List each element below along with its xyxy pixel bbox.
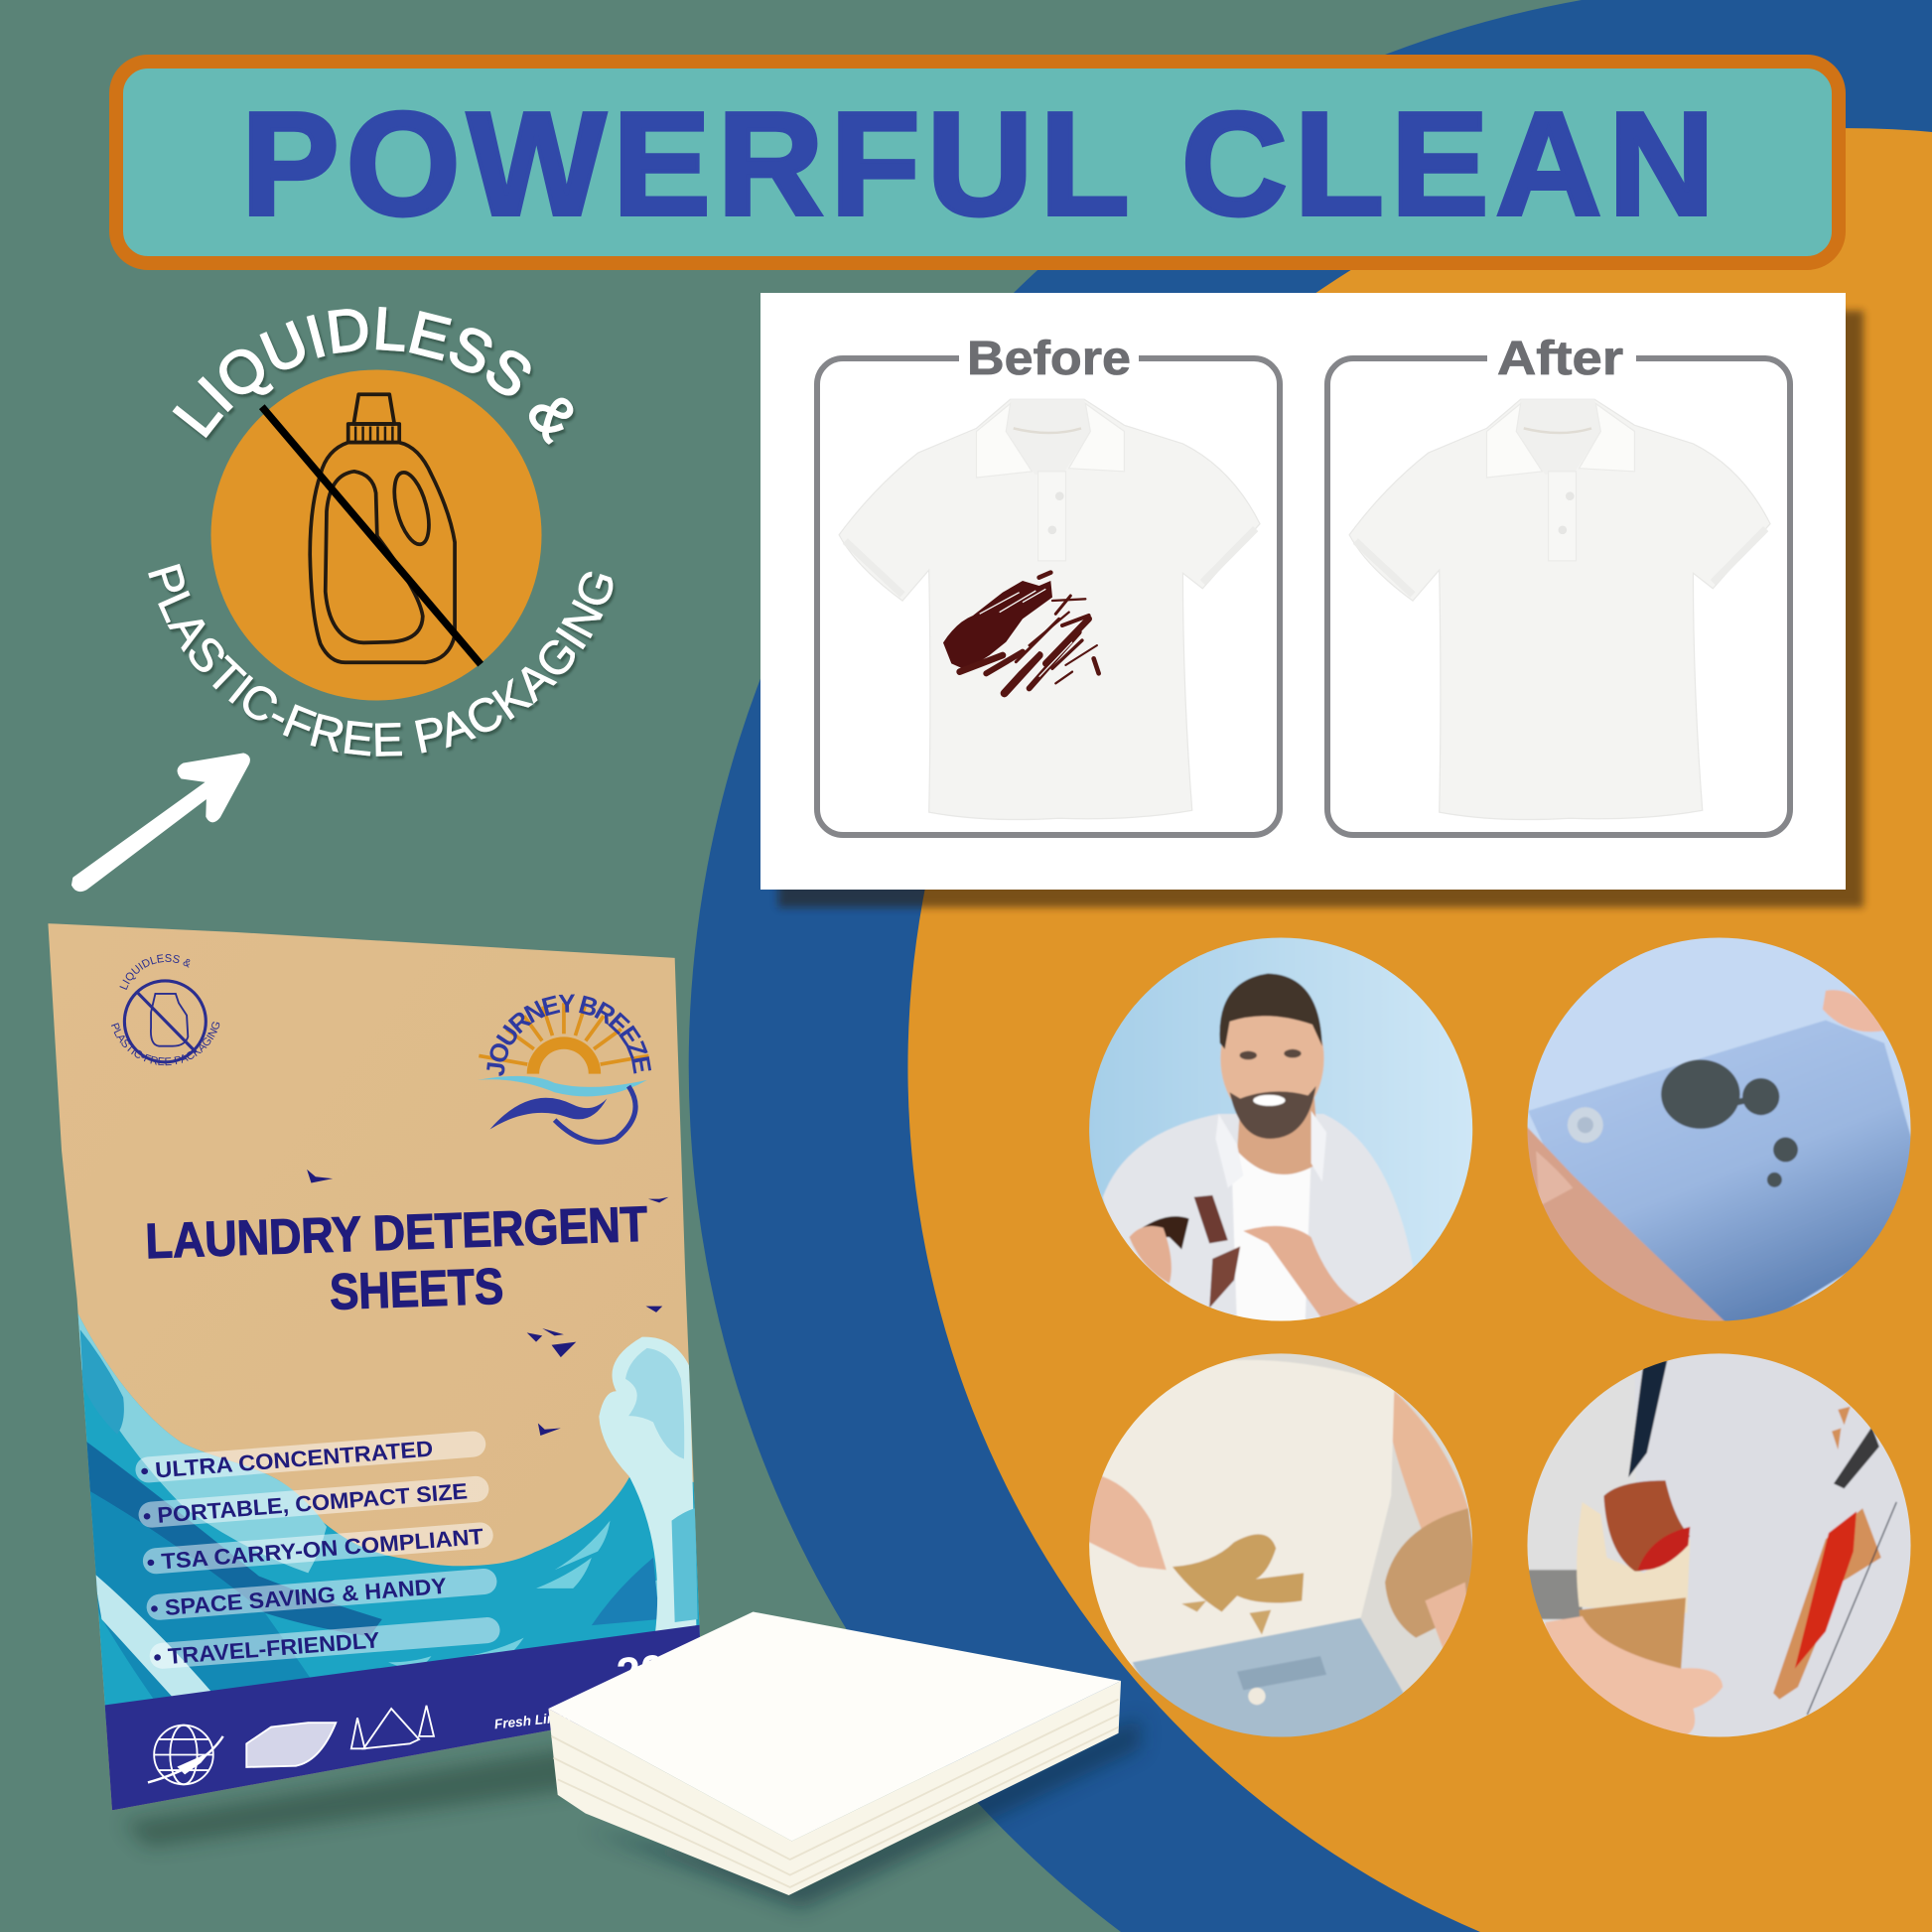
brown stain xyxy=(943,573,1099,693)
fresh label: Fresh Linen xyxy=(493,1709,572,1731)
feature pill: space saving: • SPACE SAVING & HANDY xyxy=(150,1574,448,1621)
pack body xyxy=(37,910,715,1823)
background: orange arc xyxy=(907,128,1932,1932)
birds xyxy=(307,1170,668,1436)
detergent sheets stack xyxy=(548,1611,1140,1909)
panel shadow xyxy=(778,311,1863,907)
mini badge: LIQUIDLESS & xyxy=(119,954,191,990)
product pack: laundry detergent sheets xyxy=(48,923,700,1853)
after frame xyxy=(1327,333,1790,835)
badge: liquidless and plastic-free packaging xyxy=(148,307,616,760)
feature pill: travel friendly: • TRAVEL-FRIENDLY xyxy=(153,1627,380,1670)
after label: After xyxy=(1497,333,1623,385)
photo: ink stain on blue shirt xyxy=(1521,929,1921,1329)
travel icons xyxy=(148,1706,434,1784)
icon: globe with plane xyxy=(148,1725,223,1784)
sheets top face xyxy=(548,1611,1121,1841)
feature pill: travel friendly xyxy=(149,1616,501,1670)
icon: crossed-out bottle xyxy=(262,394,481,664)
photo: man with chocolate stain xyxy=(1083,929,1483,1329)
icon: cruise ship xyxy=(246,1723,336,1767)
wave artwork xyxy=(76,1311,715,1724)
journey breeze logo xyxy=(479,995,651,1145)
before label: Before xyxy=(967,333,1131,385)
sheet count: 20 xyxy=(615,1646,667,1698)
feature pill: ultra concentrated xyxy=(134,1431,486,1484)
panel white background xyxy=(760,293,1846,890)
curved text: liquidless: LIQUIDLESS & xyxy=(173,307,576,449)
pack shadow xyxy=(123,1724,709,1848)
photo: coffee stain on cream tee xyxy=(1083,1348,1483,1748)
background: blue arc xyxy=(689,0,1932,1932)
title banner xyxy=(116,62,1839,263)
feature pill: tsa: • TSA CARRY-ON COMPLIANT xyxy=(146,1524,484,1576)
sheets side xyxy=(548,1681,1121,1895)
photo: ketchup stain from hot dog xyxy=(1521,1348,1921,1748)
mini badge xyxy=(111,954,220,1066)
icon: tent and trees xyxy=(351,1706,434,1748)
feature pill: ultra concentrated: • ULTRA CONCENTRATED xyxy=(140,1437,434,1484)
panel: before and after xyxy=(760,293,1863,907)
title text: POWERFUL CLEAN xyxy=(241,82,1715,246)
navy band xyxy=(101,1624,715,1823)
feature list xyxy=(134,1431,501,1670)
sheets shadow xyxy=(586,1718,1140,1909)
pack subheading: SHEETS xyxy=(329,1258,504,1320)
stain photos xyxy=(1083,929,1921,1748)
feature pill: portable: • PORTABLE, COMPACT SIZE xyxy=(142,1478,469,1529)
before frame xyxy=(817,333,1280,835)
mini badge: PLASTIC-FREE PACKAGING xyxy=(111,1022,220,1066)
stained polo shirt xyxy=(839,399,1260,820)
badge orange disc xyxy=(210,369,542,701)
pack heading: LAUNDRY DETERGENT xyxy=(145,1196,648,1269)
journey breeze logo: JOURNEY BREEZE xyxy=(486,995,651,1076)
arrow pointing to badge xyxy=(72,755,249,891)
curved text: plastic-free packaging: PLASTIC-FREE PACKAGING xyxy=(148,564,616,760)
clean polo shirt xyxy=(1349,399,1770,820)
